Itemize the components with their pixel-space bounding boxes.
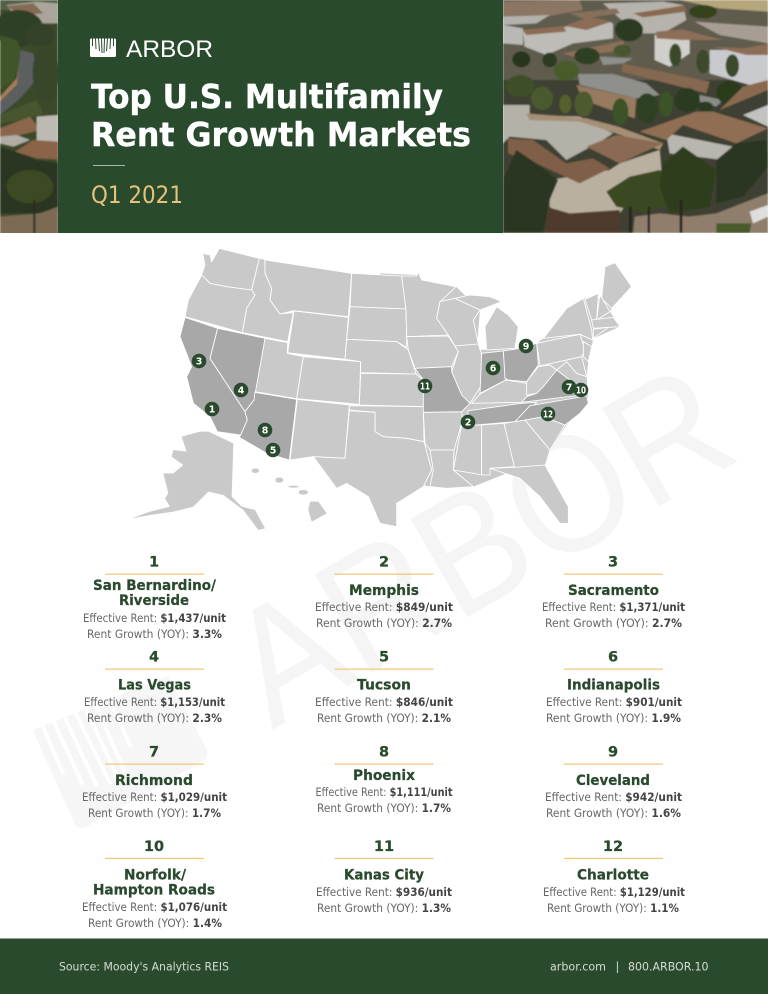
market 2: Memphis (315, 554, 454, 630)
pin 5: 5 (270, 446, 276, 456)
market 4: Las Vegas: 4 (149, 650, 159, 666)
market 11: Kanas City: Rent Growth (YOY): 1.3% (317, 901, 452, 915)
pin 3: 3 (196, 356, 202, 368)
market 5: Tucson: Effective Rent: $846/unit (315, 695, 454, 709)
market 11: Kanas City: 11 (374, 839, 394, 855)
pin 3 (192, 354, 206, 368)
logo: Arbor icon (90, 38, 116, 57)
market 7: Richmond (82, 744, 227, 820)
market 12: Charlotte (543, 839, 685, 915)
market 9: Cleveland: Cleveland (576, 773, 650, 789)
pin 10: 10 (576, 386, 586, 396)
pin 8: 8 (262, 426, 269, 436)
pin 9: 9 (523, 342, 529, 352)
market 10: Norfolk/Hampton Roads (82, 839, 227, 930)
market 1: San Bernardino/Riverside: Riverside (119, 593, 189, 609)
market 1: San Bernardino/Riverside: San Bernardino/ (93, 578, 217, 594)
highlighted western states (180, 317, 297, 460)
market 4: Las Vegas: Rent Growth (YOY): 2.3% (87, 711, 223, 725)
website and phone: | (616, 960, 619, 974)
pin 1: 1 (209, 404, 215, 416)
market 2: Memphis: Effective Rent: $849/unit (315, 600, 454, 614)
market 11: Kanas City (316, 839, 453, 915)
market 8: Phoenix: Rent Growth (YOY): 1.7% (317, 801, 452, 815)
highlighted eastern states (415, 343, 588, 427)
western states (132, 248, 432, 530)
pin 9 (519, 339, 533, 353)
market 1: San Bernardino/Riverside: Effective Rent: $1,437/unit (83, 611, 226, 625)
market 3: Sacramento: Sacramento (568, 583, 659, 599)
pin 12 (541, 407, 555, 421)
pin 4: 4 (238, 386, 245, 396)
market 6: Indianapolis: 6 (608, 650, 618, 666)
pin 8 (258, 423, 272, 437)
footer bar (0, 938, 768, 994)
market 1: San Bernardino/Riverside (83, 554, 226, 641)
market 5: Tucson (315, 650, 454, 725)
pin 6: 6 (490, 364, 497, 374)
pin 11: 11 (420, 382, 430, 392)
pin 4 (234, 383, 248, 397)
market 10: Norfolk/Hampton Roads: Rent Growth (YOY): 1.4% (88, 916, 223, 930)
market 4: Las Vegas: Las Vegas (118, 678, 191, 694)
eastern states (402, 263, 632, 523)
market 8: Phoenix (316, 744, 453, 815)
market 3: Sacramento: 3 (608, 554, 618, 570)
photo: aerial view left (0, 0, 59, 235)
market 6: Indianapolis: Rent Growth (YOY): 1.9% (546, 711, 682, 725)
market 12: Charlotte: 12 (603, 839, 623, 855)
subtitle: quarter: Q1 2021 (91, 181, 183, 209)
landmass underlay (380, 263, 632, 523)
logo wordmark: ARBOR (126, 36, 213, 63)
market 8: Phoenix: 8 (379, 744, 389, 760)
market 7: Richmond: Rent Growth (YOY): 1.7% (88, 806, 222, 820)
market 3: Sacramento (542, 554, 685, 630)
map of United States (132, 248, 632, 530)
title line 1: Top U.S. Multifamily (91, 77, 443, 116)
pin 11 (418, 379, 432, 393)
market 4: Las Vegas (84, 650, 225, 725)
market 9: Cleveland: Rent Growth (YOY): 1.6% (546, 806, 682, 820)
website and phone: 800.ARBOR.10 (628, 960, 708, 974)
watermark: Arbor logo (34, 676, 207, 828)
map pins (192, 339, 588, 457)
market 3: Sacramento: Rent Growth (YOY): 2.7% (545, 616, 683, 630)
header panel (58, 0, 503, 233)
website and phone: arbor.com (550, 960, 606, 974)
market 2: Memphis: 2 (379, 554, 389, 570)
title line 2: Rent Growth Markets (91, 115, 471, 154)
market 10: Norfolk/Hampton Roads: 10 (144, 839, 164, 855)
market 9: Cleveland: 9 (608, 744, 618, 760)
pin 2: 2 (465, 418, 471, 428)
market 12: Charlotte: Charlotte (577, 867, 649, 883)
market 11: Kanas City: Effective Rent: $936/unit (316, 885, 453, 899)
source note: Source: Moody's Analytics REIS (59, 960, 229, 974)
market 6: Indianapolis (546, 650, 683, 725)
market 5: Tucson: Tucson (357, 678, 411, 694)
pin 2 (461, 415, 475, 429)
pin 1 (205, 402, 219, 416)
market 5: Tucson: Rent Growth (YOY): 2.1% (317, 711, 452, 725)
market 6: Indianapolis: Effective Rent: $901/unit (546, 695, 683, 709)
pin 5 (266, 443, 280, 457)
market 7: Richmond: 7 (149, 744, 159, 760)
market 9: Cleveland: Effective Rent: $942/unit (545, 790, 683, 804)
market 7: Richmond: Richmond (115, 773, 193, 789)
market 10: Norfolk/Hampton Roads: Effective Rent: $1,076/unit (82, 900, 227, 914)
market 12: Charlotte: Rent Growth (YOY): 1.1% (547, 901, 680, 915)
market 3: Sacramento: Effective Rent: $1,371/unit (542, 600, 685, 614)
pin 6 (486, 361, 500, 375)
market 7: Richmond: Effective Rent: $1,029/unit (82, 790, 227, 804)
market 1: San Bernardino/Riverside: 1 (149, 554, 159, 570)
market 2: Memphis: Rent Growth (YOY): 2.7% (316, 616, 453, 630)
market 12: Charlotte: Effective Rent: $1,129/unit (543, 885, 685, 899)
photo: aerial view right (503, 0, 768, 233)
market 11: Kanas City: Kanas City (344, 867, 424, 883)
market 8: Phoenix: Phoenix (353, 768, 416, 784)
website and phone (550, 960, 708, 974)
market 6: Indianapolis: Indianapolis (567, 678, 660, 694)
pin 7 (562, 380, 576, 394)
market 5: Tucson: 5 (379, 650, 389, 666)
market 1: San Bernardino/Riverside: Rent Growth (YOY): 3.3% (87, 627, 223, 641)
market 8: Phoenix: Effective Rent: $1,111/unit (316, 785, 453, 799)
market 10: Norfolk/Hampton Roads: Norfolk/ (124, 867, 187, 883)
market 10: Norfolk/Hampton Roads: Hampton Roads (93, 882, 215, 898)
market 2: Memphis: Memphis (349, 583, 419, 599)
pin 12: 12 (543, 410, 553, 420)
market 9: Cleveland (545, 744, 683, 820)
market 4: Las Vegas: Effective Rent: $1,153/unit (84, 695, 225, 709)
pin 7: 7 (566, 382, 572, 394)
pin 10 (574, 383, 588, 397)
